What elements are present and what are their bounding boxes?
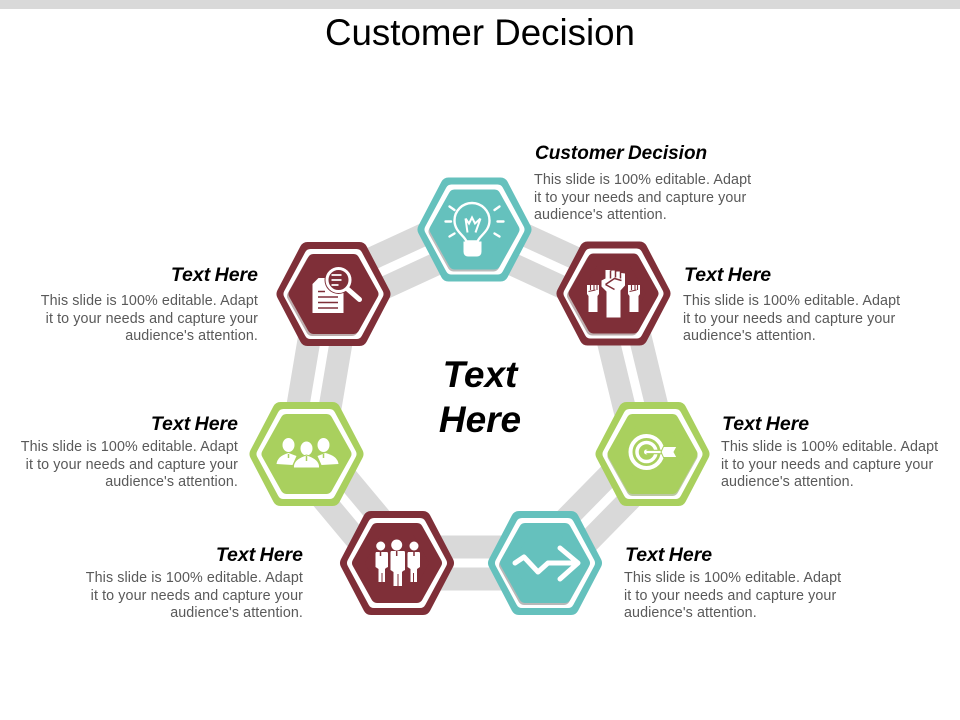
body: [21, 439, 238, 490]
body: This slide is 100% editable. Adapt: [624, 570, 841, 586]
body: audience's attention.: [721, 474, 854, 490]
top bar: [0, 0, 960, 9]
icon: target: [630, 436, 677, 468]
body: it to your needs and capture your: [46, 311, 258, 327]
hexagon: lightbulb: [426, 186, 524, 274]
heading: Text Here: [722, 413, 809, 435]
text block: upper left: [41, 264, 258, 344]
body: it to your needs and capture your: [683, 311, 895, 327]
body: This slide is 100% editable. Adapt: [21, 439, 238, 455]
heading: Text Here: [216, 544, 303, 566]
icon: fists: [587, 270, 640, 318]
body: This slide is 100% editable. Adapt: [683, 293, 900, 309]
text block: lower right: [624, 544, 841, 621]
body: audience's attention.: [125, 328, 258, 344]
text block: upper right: [683, 264, 900, 344]
hexagon: document search: [284, 250, 382, 338]
text block: middle right: [721, 413, 938, 490]
heading: Text Here: [151, 413, 238, 435]
body: audience's attention.: [534, 207, 667, 223]
gray connecting ring: [306, 229, 652, 563]
body: [41, 293, 258, 344]
body: [86, 570, 303, 621]
body: it to your needs and capture your: [91, 588, 303, 604]
heading: Text Here: [171, 264, 258, 286]
body: it to your needs and capture your: [26, 457, 238, 473]
body: audience's attention.: [105, 474, 238, 490]
body: audience's attention.: [683, 328, 816, 344]
body: [721, 439, 938, 490]
body: it to your needs and capture your: [624, 588, 836, 604]
icon: magnifier over document: [312, 266, 360, 313]
body: audience's attention.: [170, 605, 303, 621]
body: This slide is 100% editable. Adapt: [41, 293, 258, 309]
icon: group busts: [276, 438, 338, 468]
icon: lightbulb: [446, 203, 504, 256]
text block: lower left: [86, 544, 303, 621]
body: it to your needs and capture your: [721, 457, 933, 473]
body: This slide is 100% editable. Adapt: [86, 570, 303, 586]
body: This slide is 100% editable. Adapt: [534, 172, 751, 188]
body: [534, 172, 751, 223]
heading: Text Here: [625, 544, 712, 566]
hexagon: target: [604, 410, 702, 498]
body: [683, 293, 900, 344]
title: Customer Decision: [325, 12, 635, 53]
text block: middle left: [21, 413, 238, 490]
hexagon: trending arrow: [496, 519, 594, 607]
hexagon: team of three: [348, 519, 446, 607]
center label: [439, 354, 521, 440]
body: This slide is 100% editable. Adapt: [721, 439, 938, 455]
body: audience's attention.: [624, 605, 757, 621]
hexagon: group of people: [258, 410, 356, 498]
body: it to your needs and capture your: [534, 190, 746, 206]
hexagon: raised fists: [564, 250, 662, 338]
body: [624, 570, 841, 621]
icon: zigzag arrow: [515, 548, 578, 579]
center label: Here: [439, 399, 521, 440]
heading: Text Here: [684, 264, 771, 286]
text block: top customer decision: [534, 143, 751, 223]
icon: three standing people: [375, 540, 420, 586]
center label: Text: [443, 354, 517, 395]
heading: Customer Decision: [535, 143, 707, 164]
